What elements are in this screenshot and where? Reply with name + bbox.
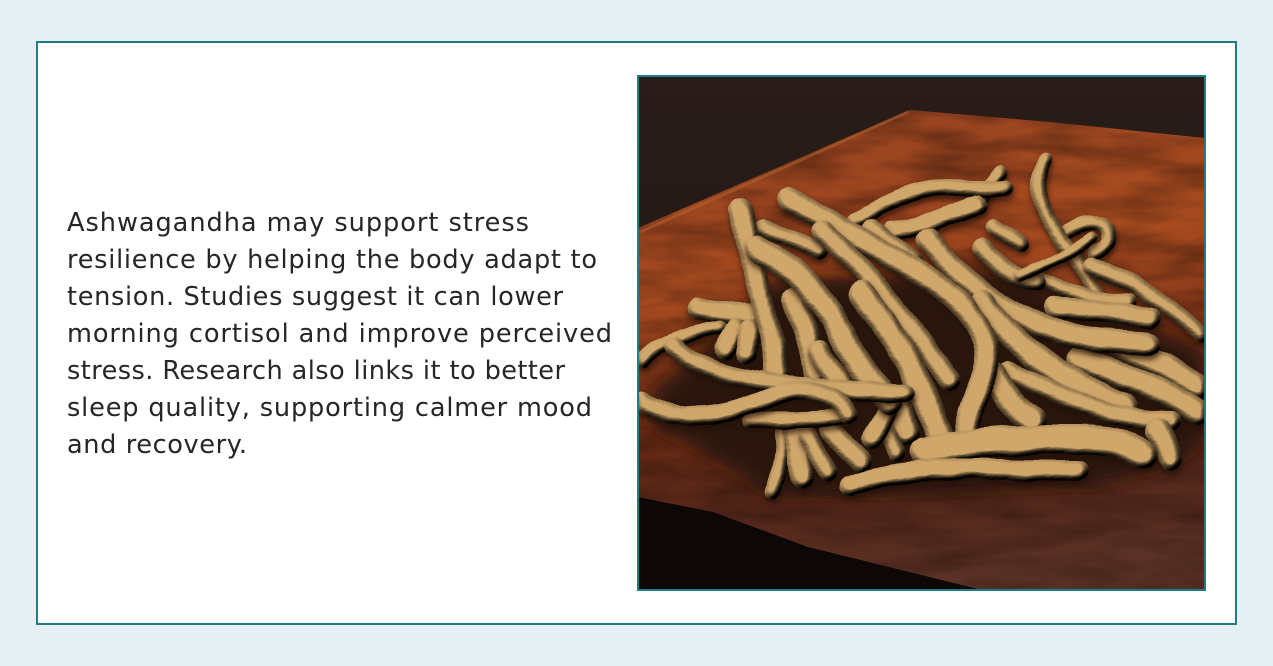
photo frame [638,76,1205,590]
text block: ashwagandha description: sleep quality, supporting calmer mood [67,393,592,423]
dark background [639,77,1204,228]
text block: ashwagandha description: and recovery. [67,430,247,460]
black base under the board [639,498,976,589]
board warm glow and grain [639,110,1204,589]
photo: ashwagandha roots on a wooden board [639,77,1204,589]
roots pile [642,160,1200,492]
wooden board top [638,110,1205,590]
text block: ashwagandha description: Ashwagandha may support stress [67,208,529,238]
text block: ashwagandha description [67,208,612,460]
text block: ashwagandha description: stress. Research also links it to better [67,356,565,386]
board highlighted edge [640,112,908,232]
pile shadow [650,270,1205,495]
text block: ashwagandha description: morning cortisol and improve perceived [67,319,612,349]
text block: ashwagandha description: resilience by helping the body adapt to [67,245,597,275]
text block: ashwagandha description: tension. Studies suggest it can lower [67,282,563,312]
